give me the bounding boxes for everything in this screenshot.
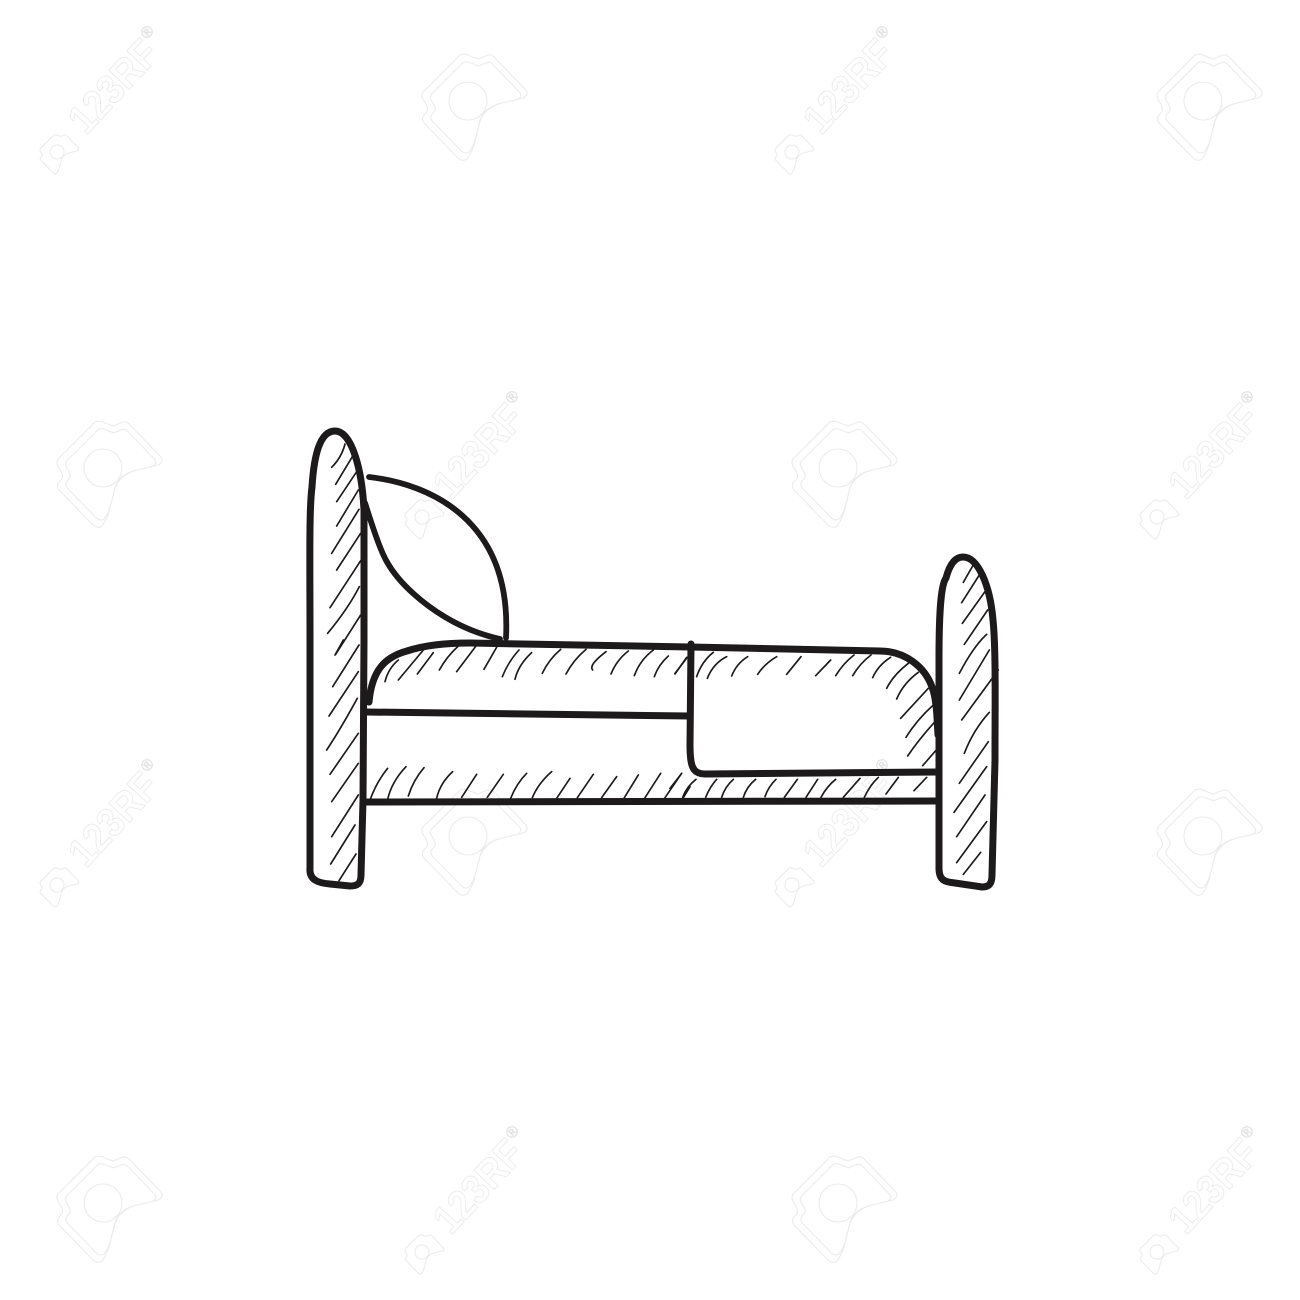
watermark logo 3: 123RF <box>59 763 168 875</box>
pillow <box>365 477 506 639</box>
watermark camera icon 4 <box>1157 789 1262 895</box>
blanket fold <box>690 644 938 774</box>
watermark logo 6: 123RF <box>1159 395 1268 507</box>
mattress top <box>369 643 938 735</box>
watermark logo 3 <box>40 755 168 907</box>
watermark logo 7: ® <box>502 1122 523 1143</box>
watermark camera icon 2 <box>1157 54 1262 160</box>
watermark logo 7 <box>405 1122 533 1274</box>
watermark logo 1: ® <box>137 22 158 43</box>
footboard <box>939 557 995 887</box>
watermark camera icon 7 <box>57 1156 162 1262</box>
watermark logo 1 <box>40 22 168 174</box>
watermark camera icon 8 <box>792 1156 897 1262</box>
watermark camera icon 1 <box>422 54 527 160</box>
hatching: headboard upper <box>328 444 361 654</box>
hatching: footboard <box>954 566 998 874</box>
watermark logo 8: ® <box>1237 1122 1258 1143</box>
watermark camera icon 3 <box>422 789 527 895</box>
watermark logo 8: 123RF <box>1159 1130 1268 1242</box>
icon: bed <box>310 431 998 887</box>
bed rail <box>364 801 938 802</box>
watermark logo 8 <box>1140 1122 1268 1274</box>
hatching: headboard lower <box>327 640 359 881</box>
hatching: mattress top left <box>385 646 687 682</box>
watermark logo 5 <box>405 387 533 539</box>
watermark logo 6 <box>1140 387 1268 539</box>
hatching: bed frame right <box>670 773 927 797</box>
watermark logo 6: ® <box>1237 387 1258 408</box>
watermark logo 4: ® <box>872 755 893 776</box>
watermark logo 4: 123RF <box>794 763 903 875</box>
watermark camera icon 6 <box>792 421 897 527</box>
watermark logo 2 <box>775 22 903 174</box>
watermark logo 4 <box>775 755 903 907</box>
hatching: blanket top and foot corner <box>675 652 936 766</box>
watermark logo 5: ® <box>502 387 523 408</box>
watermark logo 2: 123RF <box>794 30 903 142</box>
watermark camera icon 5 <box>57 421 162 527</box>
watermark logo 5: 123RF <box>424 395 533 507</box>
watermark logo 7: 123RF <box>424 1130 533 1242</box>
watermark logo 1: 123RF <box>59 30 168 142</box>
hatching: bed frame left <box>370 767 690 800</box>
watermark logo 2: ® <box>872 22 893 43</box>
headboard <box>310 431 364 886</box>
watermark logo 3: ® <box>137 755 158 776</box>
mattress bottom line <box>366 712 690 716</box>
